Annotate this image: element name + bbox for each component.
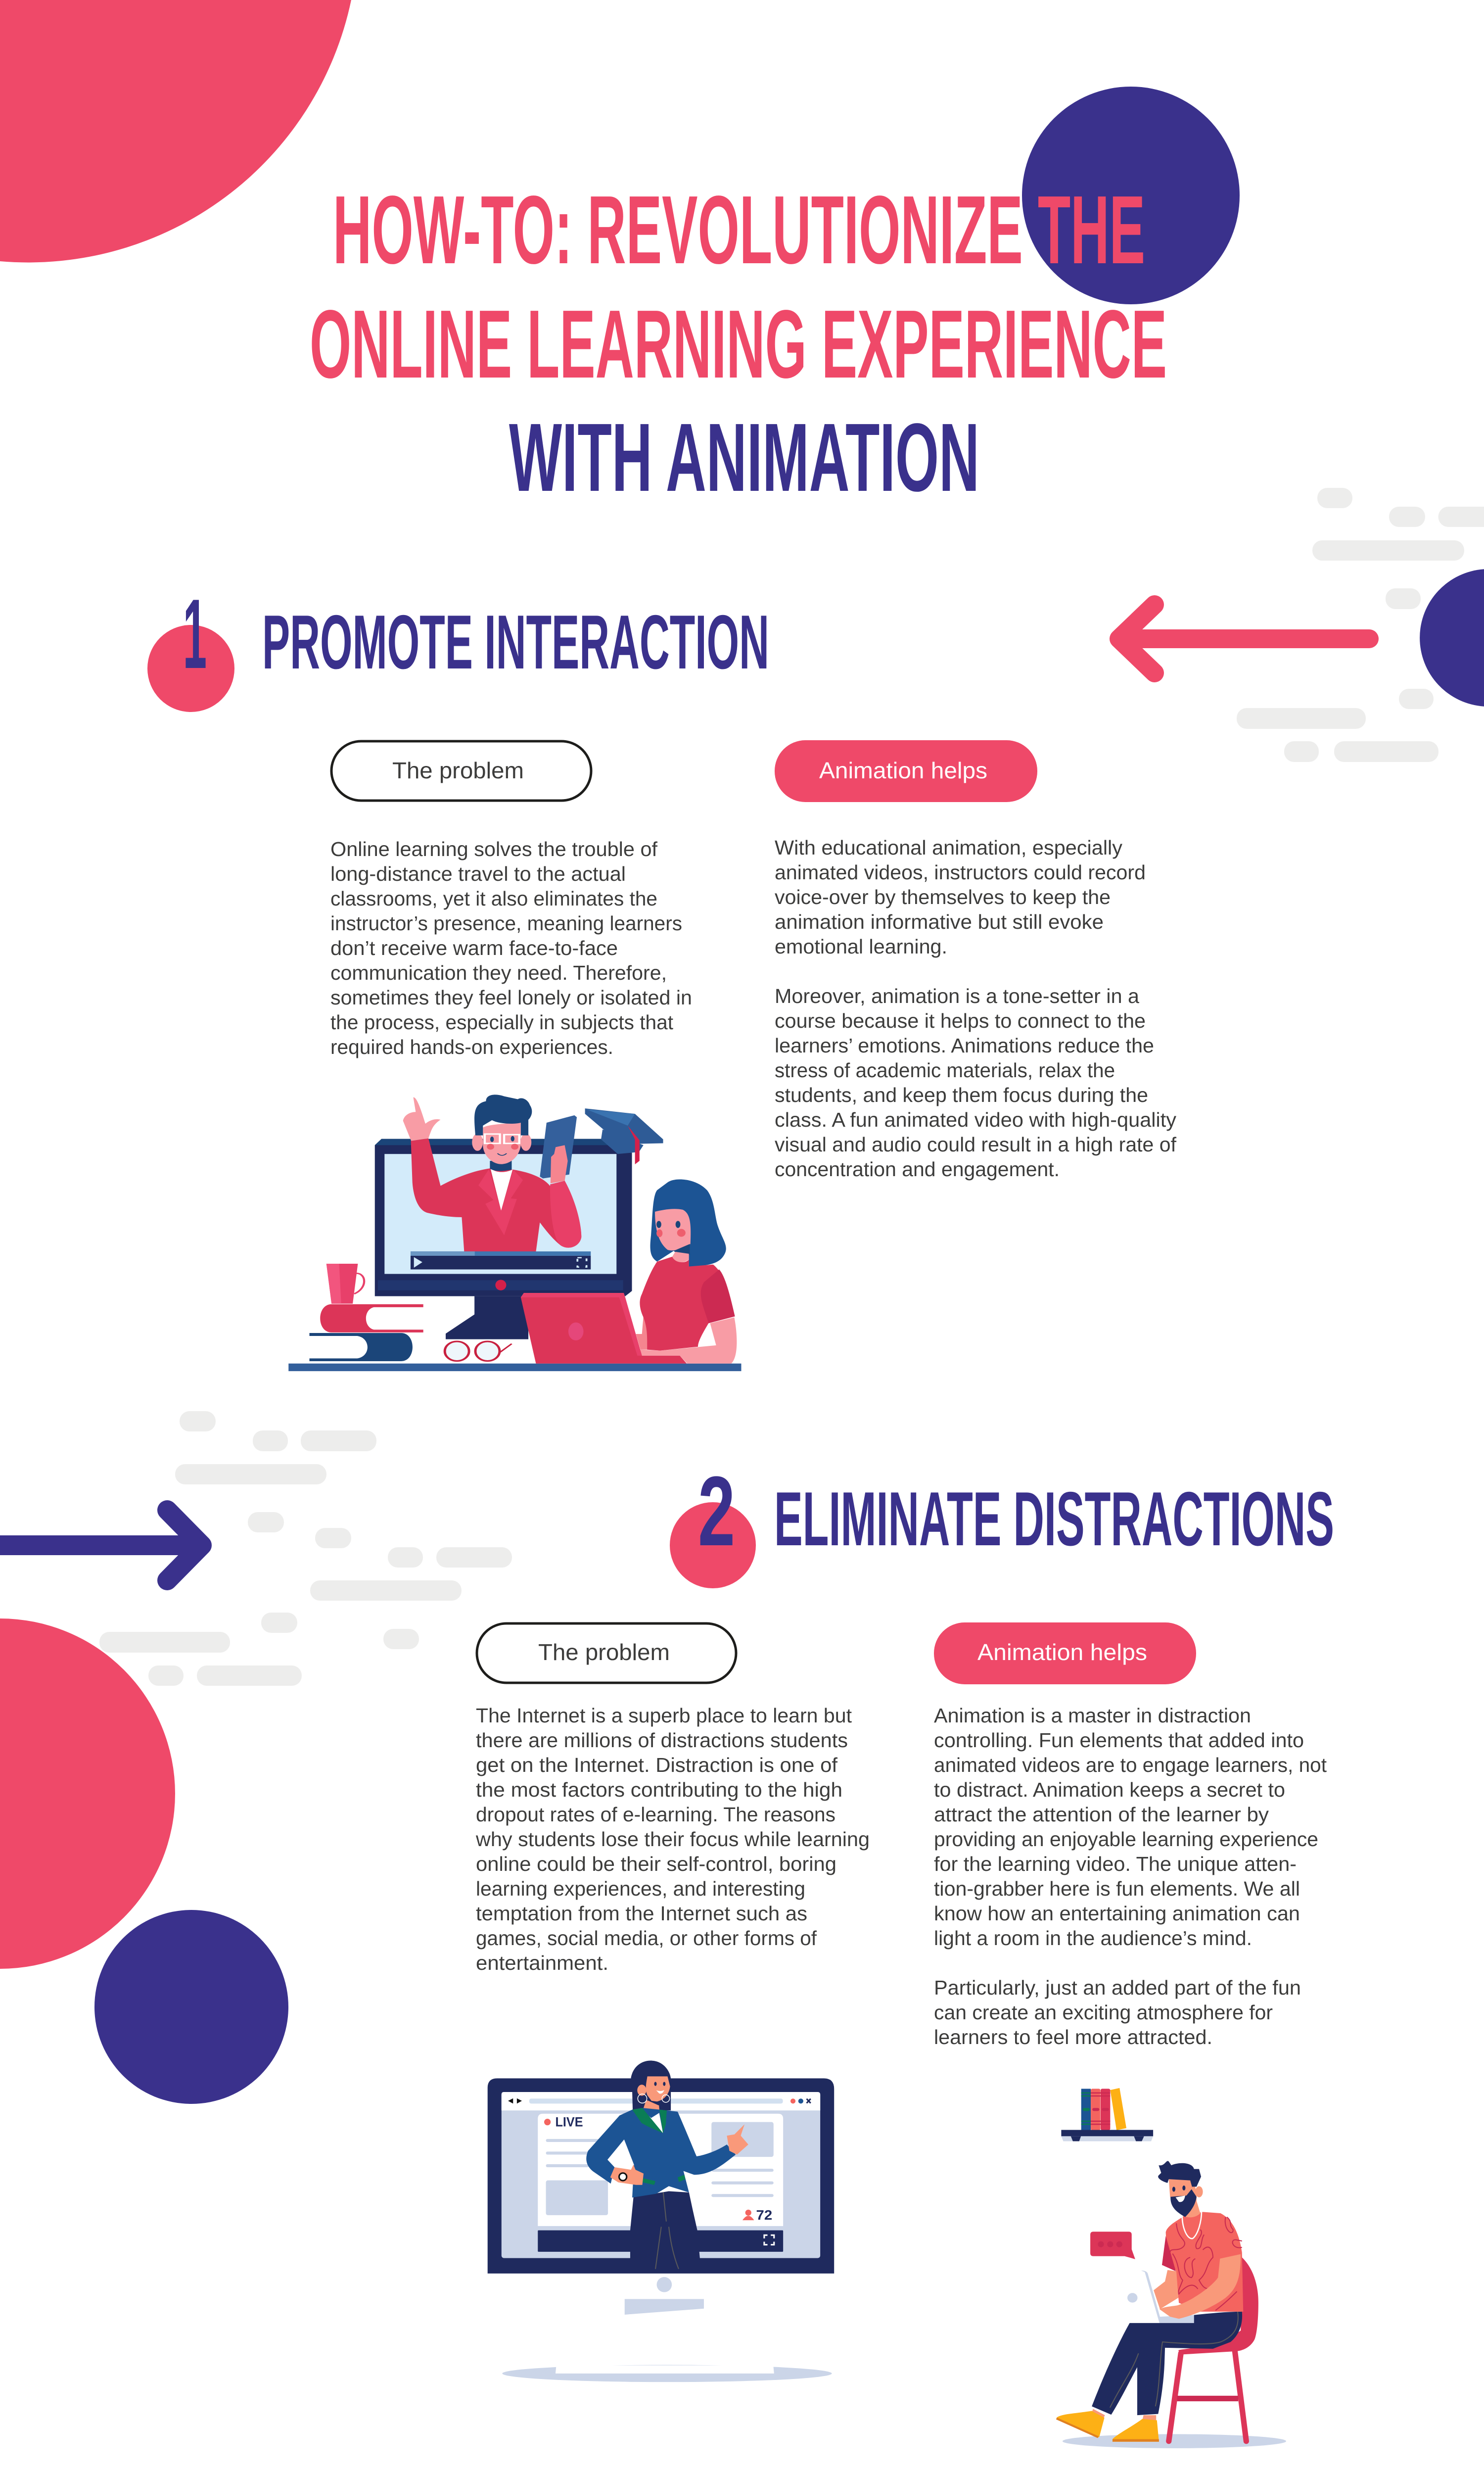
arrow: purple pointing right [0, 1535, 200, 1555]
text: animation helps 2: Animation is a master in distraction [934, 1704, 1251, 1727]
decorative circle: left pink [0, 1618, 175, 1969]
title [310, 176, 1167, 512]
text: animation helps 1: students, and keep them focus during the [775, 1084, 1148, 1106]
button: animation helps 1: Animation helps [819, 758, 987, 783]
decorative circle: top left pink [0, 0, 351, 262]
text: animation helps 2: attract the attention of the learner by [934, 1803, 1269, 1826]
text: animation helps 1: class. A fun animated video with high-quality [775, 1108, 1176, 1131]
illustration: presenter on live stream monitor: LIVE [555, 2114, 583, 2129]
illustration: man with laptop on stool under bookshelf [1057, 2088, 1286, 2448]
arrow head: purple [167, 1510, 202, 1580]
text: problem 2: online could be their self-control, boring [476, 1853, 836, 1875]
section 2 number badge [670, 1456, 756, 1588]
section 2 number badge: 2 [698, 1456, 735, 1567]
button: animation helps 1 [775, 740, 1037, 802]
text: animation helps 2: learners to feel more attracted. [934, 2026, 1212, 2048]
section 1 number badge [147, 579, 234, 712]
text: animation helps 2: controlling. Fun elements that added into [934, 1729, 1304, 1752]
text: animation helps 2: know how an entertaining animation can [934, 1902, 1300, 1925]
text: animation helps 1: course because it helps to connect to the [775, 1009, 1146, 1032]
text: animation helps 1: animated videos, instructors could record [775, 861, 1146, 884]
decorative circle: right purple [1420, 569, 1484, 707]
text: animation helps 1: With educational animation, especially [775, 836, 1122, 859]
text: animation helps 1: stress of academic materials, relax the [775, 1059, 1115, 1082]
text: animation helps 1: Moreover, animation is a tone-setter in a [775, 985, 1139, 1007]
illustration: presenter on live stream monitor: 72 [756, 2207, 772, 2223]
button: the problem 1 [331, 741, 591, 801]
text: problem 2: The Internet is a superb place to learn but [476, 1704, 852, 1727]
text: animation helps 1: emotional learning. [775, 935, 947, 958]
text: animation helps 1 [775, 836, 1177, 1181]
text: problem 1: don’t receive warm face-to-face [330, 937, 618, 959]
illustration: presenter on live stream monitor [488, 2061, 834, 2382]
text: problem 2: games, social media, or other forms of [476, 1927, 817, 1950]
text: animation helps 1: voice-over by themselves to keep the [775, 886, 1111, 908]
button: the problem 1: The problem [392, 758, 524, 783]
text: animation helps 1: visual and audio could result in a high rate of [775, 1133, 1177, 1156]
text: animation helps 2 [934, 1704, 1327, 2048]
text: animation helps 2: animated videos are to engage learners, not [934, 1754, 1327, 1776]
section 1 heading: PROMOTE INTERACTION [262, 599, 769, 685]
text: problem 2 [475, 1704, 870, 1974]
decorative circle: top right purple [1022, 87, 1240, 304]
text: problem 2: get on the Internet. Distraction is one of [476, 1754, 838, 1776]
text: problem 1: the process, especially in subjects that [330, 1011, 674, 1034]
text: animation helps 2: providing an enjoyable learning experience [934, 1828, 1318, 1851]
text: animation helps 1: animation informative but still evoke [775, 910, 1104, 933]
illustration: teacher on monitor and student with laptop [288, 1094, 742, 1371]
text: problem 1: required hands-on experiences. [330, 1036, 613, 1058]
text: animation helps 1: learners’ emotions. Animations reduce the [775, 1034, 1154, 1057]
text: problem 1 [330, 838, 692, 1058]
text: problem 2: entertainment. [476, 1951, 608, 1974]
text: problem 1: instructor’s presence, meaning learners [330, 912, 682, 935]
text: animation helps 2: to distract. Animation keeps a secret to [934, 1778, 1285, 1801]
text: problem 2: the most factors contributing to the high [476, 1778, 842, 1801]
section 1 number badge: 1 [183, 579, 207, 689]
button: animation helps 2 [934, 1622, 1196, 1684]
decorative circle: left purple [94, 1910, 288, 2104]
text: animation helps 2: tion-grabber here is fun elements. We all [934, 1877, 1300, 1900]
text: problem 2: dropout rates of e-learning. The reasons [476, 1803, 835, 1826]
text: problem 1: Online learning solves the trouble of [330, 838, 658, 860]
text: problem 2: learning experiences, and interesting [476, 1877, 805, 1900]
text: animation helps 2: light a room in the audience’s mind. [934, 1927, 1252, 1950]
button: the problem 2 [477, 1623, 736, 1683]
text: problem 2: temptation from the Internet such as [476, 1902, 807, 1925]
decoration: grey dashes top right [1237, 488, 1484, 762]
text: problem 1: communication they need. Therefore, [330, 961, 667, 984]
decoration: grey dashes left [99, 1411, 512, 1686]
text: animation helps 2: for the learning video. The unique atten- [934, 1853, 1297, 1875]
text: problem 1: sometimes they feel lonely or isolated in [330, 986, 692, 1009]
text: animation helps 1: concentration and engagement. [775, 1158, 1060, 1181]
text: problem 2: why students lose their focus while learning [475, 1828, 870, 1851]
arrow: pink pointing left [1119, 605, 1369, 673]
title: WITH ANIMATION [509, 403, 979, 512]
text: animation helps 2: can create an exciting atmosphere for [934, 2001, 1273, 2024]
button: animation helps 2: Animation helps [977, 1639, 1147, 1665]
text: problem 1: classrooms, yet it also eliminates the [330, 887, 657, 910]
button: the problem 2: The problem [538, 1639, 670, 1665]
text: animation helps 2: Particularly, just an added part of the fun [934, 1976, 1301, 1999]
text: problem 2: there are millions of distractions students [476, 1729, 848, 1752]
text: problem 1: long-distance travel to the actual [330, 862, 626, 885]
